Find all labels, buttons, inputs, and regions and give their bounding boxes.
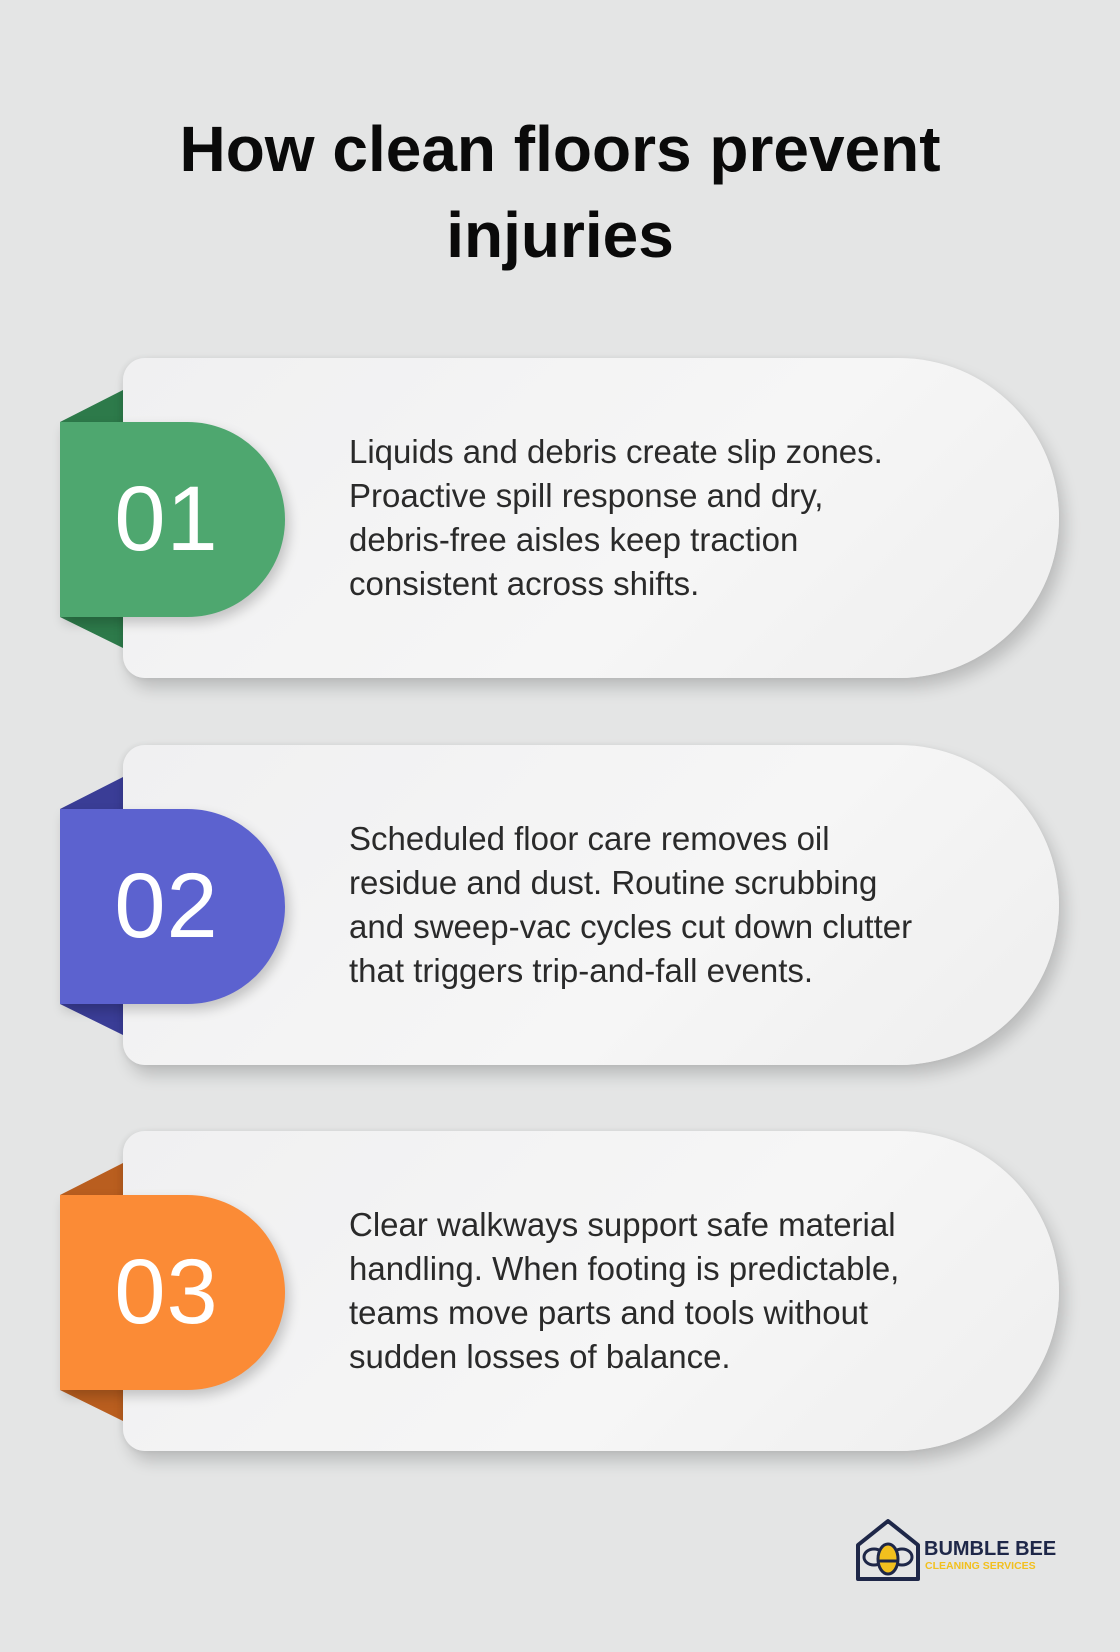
text 03: teams move parts and tools without xyxy=(349,1294,868,1331)
logo xyxy=(856,1519,1056,1581)
badge 01: 01 xyxy=(114,468,219,570)
panel: step 02 xyxy=(58,744,1072,1082)
fold: blue xyxy=(60,777,123,1035)
text 01: Liquids and debris create slip zones. xyxy=(349,433,883,470)
text 01: Proactive spill response and dry, xyxy=(349,477,823,514)
card background xyxy=(123,358,1059,678)
badge 02 xyxy=(60,809,285,1004)
title: How clean floors prevent xyxy=(179,113,941,185)
text 03: sudden losses of balance. xyxy=(349,1338,731,1375)
text 02: and sweep-vac cycles cut down clutter xyxy=(349,908,912,945)
badge 01 xyxy=(60,422,285,617)
badge 03 xyxy=(60,1195,285,1390)
text 02: residue and dust. Routine scrubbing xyxy=(349,864,877,901)
title xyxy=(179,113,941,271)
text 02 xyxy=(349,820,912,989)
text 02: Scheduled floor care removes oil xyxy=(349,820,830,857)
icon: house bee xyxy=(856,1519,920,1581)
fold: green xyxy=(60,390,123,648)
panel: step 03 xyxy=(58,1130,1072,1468)
text 01 xyxy=(349,433,883,602)
text 03: Clear walkways support safe material xyxy=(349,1206,896,1243)
logo text: BUMBLE BEE xyxy=(924,1538,1056,1560)
fold: orange xyxy=(60,1163,123,1421)
text 03: handling. When footing is predictable, xyxy=(349,1250,899,1287)
panel: step 01 xyxy=(58,357,1072,695)
title: injuries xyxy=(446,199,674,271)
card background xyxy=(123,745,1059,1065)
text 03 xyxy=(349,1206,899,1375)
card background xyxy=(123,1131,1059,1451)
badge 02: 02 xyxy=(114,855,219,957)
badge 03: 03 xyxy=(114,1241,219,1343)
text 02: that triggers trip-and-fall events. xyxy=(349,952,813,989)
text 01: debris-free aisles keep traction xyxy=(349,521,798,558)
logo: CLEANING SERVICES xyxy=(925,1560,1036,1572)
text 01: consistent across shifts. xyxy=(349,565,699,602)
